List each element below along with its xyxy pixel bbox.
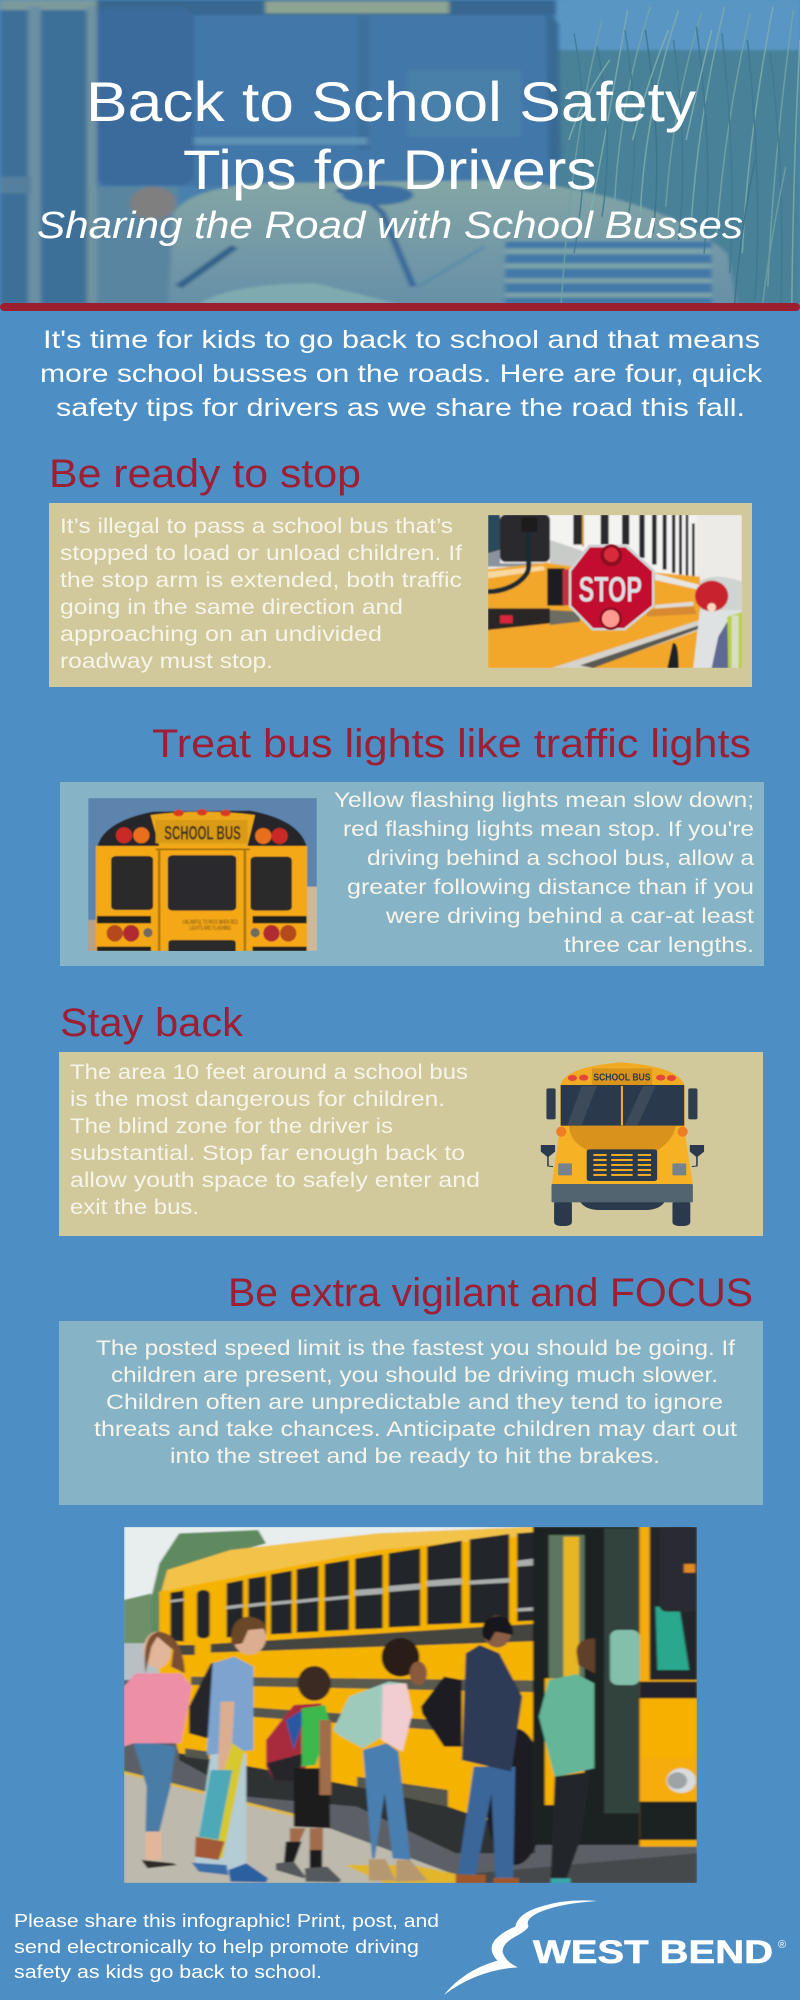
photo: rear of school bus: SCHOOL BUS (164, 822, 241, 844)
body text: red flashing lights mean stop. If you're (343, 818, 754, 841)
icon: swoosh (444, 1900, 597, 1995)
body text (334, 789, 754, 957)
registered mark: ® (778, 1939, 786, 1951)
heading: Stay back (60, 1001, 244, 1045)
logo: West Bend (444, 1900, 786, 1995)
footer call to action (14, 1911, 439, 1982)
title (86, 70, 696, 201)
header banner (0, 0, 800, 311)
intro text: It's time for kids to go back to school and that means (43, 326, 760, 354)
red divider bar (0, 303, 800, 311)
footer call to action: send electronically to help promote driving (14, 1937, 419, 1957)
body text: The area 10 feet around a school bus (70, 1061, 468, 1084)
wordmark: WEST BEND (533, 1934, 773, 1970)
body text: driving behind a school bus, allow a (367, 847, 754, 870)
intro text (40, 326, 763, 422)
body text: approaching on an undivided (60, 623, 382, 646)
photo: rear of school bus: LIGHTS ARE FLASHING (189, 925, 231, 932)
heading: Be ready to stop (49, 452, 361, 496)
header photo: school bus tinted blue (0, 0, 800, 304)
body text: exit the bus. (70, 1196, 199, 1219)
body text: going in the same direction and (60, 596, 403, 619)
body text: is the most dangerous for children. (70, 1088, 445, 1111)
footer call to action: Please share this infographic! Print, post, and (14, 1911, 439, 1931)
body text: the stop arm is extended, both traffic (60, 569, 462, 592)
photo: students boarding school bus (124, 1527, 697, 1883)
body text (94, 1337, 737, 1468)
section: stay back (59, 1001, 763, 1236)
intro text: more school busses on the roads. Here are four, quick (40, 360, 763, 388)
body text: The blind zone for the driver is (70, 1115, 393, 1138)
panel: tan card (59, 1052, 763, 1236)
photo: rear of school bus (88, 798, 321, 953)
panel: tan card (49, 503, 752, 687)
body text: allow youth space to safely enter and (70, 1169, 480, 1192)
body text: Yellow flashing lights mean slow down; (334, 789, 754, 812)
footer call to action: safety as kids go back to school. (14, 1962, 322, 1982)
body text: The posted speed limit is the fastest you should be going. If (96, 1337, 735, 1360)
body text: three car lengths. (564, 934, 754, 957)
title: Tips for Drivers (183, 138, 597, 201)
body text: into the street and be ready to hit the brakes. (170, 1445, 660, 1468)
icon: front of school bus: SCHOOL BUS (593, 1071, 651, 1083)
icon: front of school bus (541, 1062, 704, 1226)
section: treat bus lights like traffic lights (60, 722, 764, 966)
body text: children are present, you should be driving much slower. (111, 1364, 718, 1387)
body text: stopped to load or unload children. If (60, 542, 462, 565)
body text: It’s illegal to pass a school bus that’s (60, 515, 453, 538)
intro text: safety tips for drivers as we share the road this fall. (56, 394, 745, 422)
heading: Be extra vigilant and FOCUS (228, 1271, 753, 1315)
body text: Children often are unpredictable and they tend to ignore (106, 1391, 723, 1414)
body text (60, 515, 462, 673)
panel: blue-grey card (59, 1321, 763, 1505)
body text: substantial. Stop far enough back to (70, 1142, 465, 1165)
title: Back to School Safety (86, 70, 696, 133)
section: be extra vigilant and focus (59, 1271, 763, 1505)
heading: Treat bus lights like traffic lights (152, 722, 751, 766)
body text: greater following distance than if you (347, 876, 754, 899)
photo: bus stop arm: STOP (579, 570, 642, 609)
body text: threats and take chances. Anticipate children may dart out (94, 1418, 737, 1441)
photo: bus stop arm (488, 515, 742, 668)
body text: roadway must stop. (60, 650, 273, 673)
section: be ready to stop (49, 452, 752, 687)
panel: blue-grey card (60, 782, 764, 966)
photo: rear of school bus: UNLAWFUL TO PASS WHEN RED (183, 919, 238, 926)
body text: were driving behind a car-at least (385, 905, 754, 928)
body text (70, 1061, 480, 1219)
subtitle: Sharing the Road with School Busses (37, 205, 743, 247)
